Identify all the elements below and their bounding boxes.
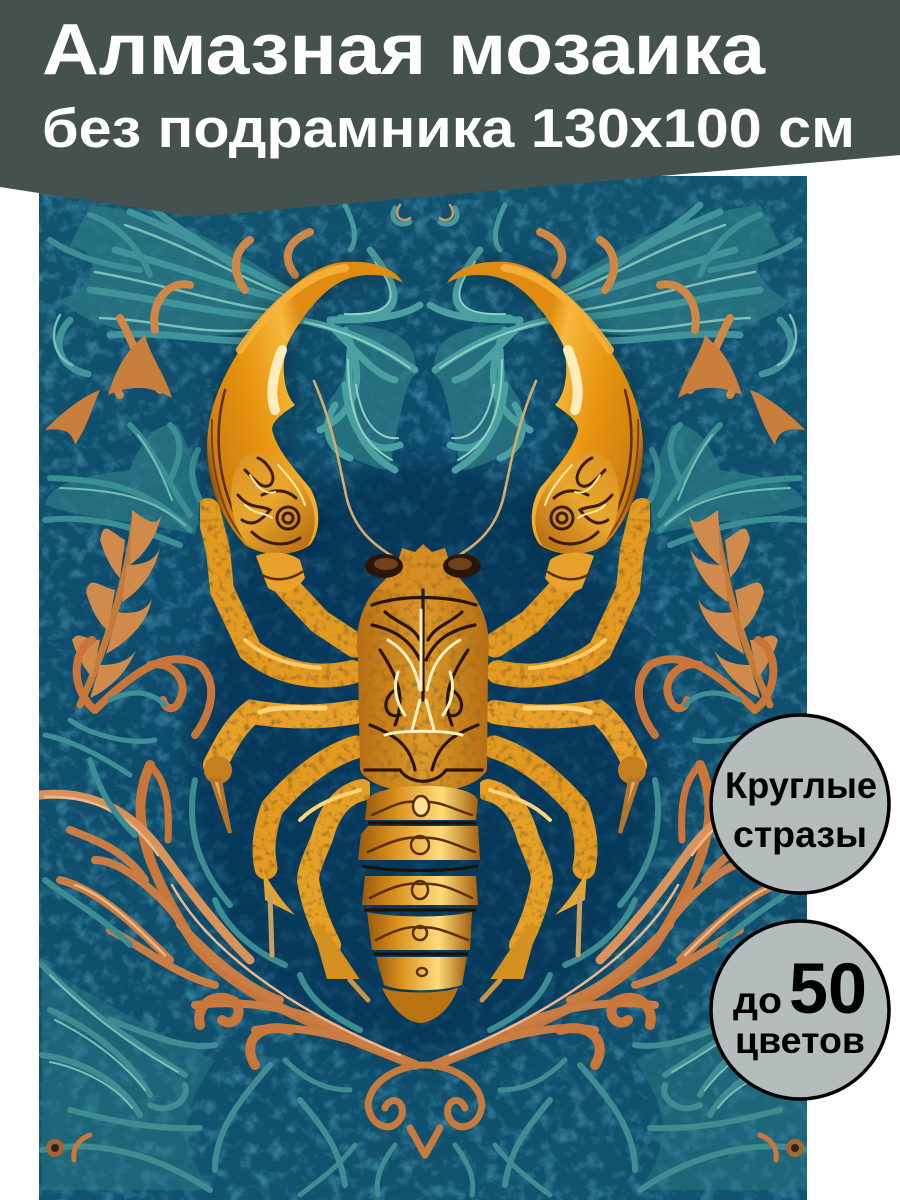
abdomen segments	[358, 786, 480, 1023]
badge: round rhinestones	[711, 715, 889, 893]
badge: up to 50 colours: цветов	[735, 1020, 865, 1061]
artwork panel: scorpion mosaic	[39, 176, 810, 1200]
mirrored right half	[425, 205, 810, 1195]
badge: round rhinestones: Круглые	[725, 765, 877, 806]
badge: up to 50 colours: 50	[789, 950, 867, 1029]
head	[365, 544, 481, 590]
abdomen engraving	[368, 796, 475, 976]
thorax filigree	[365, 590, 482, 781]
badge: up to 50 colours	[711, 921, 889, 1099]
thorax	[357, 582, 489, 792]
badge: round rhinestones: стразы	[733, 814, 867, 855]
subtitle: без подрамника 130х100 см	[42, 97, 855, 159]
title: Алмазная мозаика	[42, 10, 766, 90]
floral ornaments and left half of scorpion	[40, 205, 425, 1195]
badge: up to 50 colours: до	[733, 980, 782, 1021]
scorpion body	[357, 544, 489, 1023]
header banner	[0, 0, 900, 217]
